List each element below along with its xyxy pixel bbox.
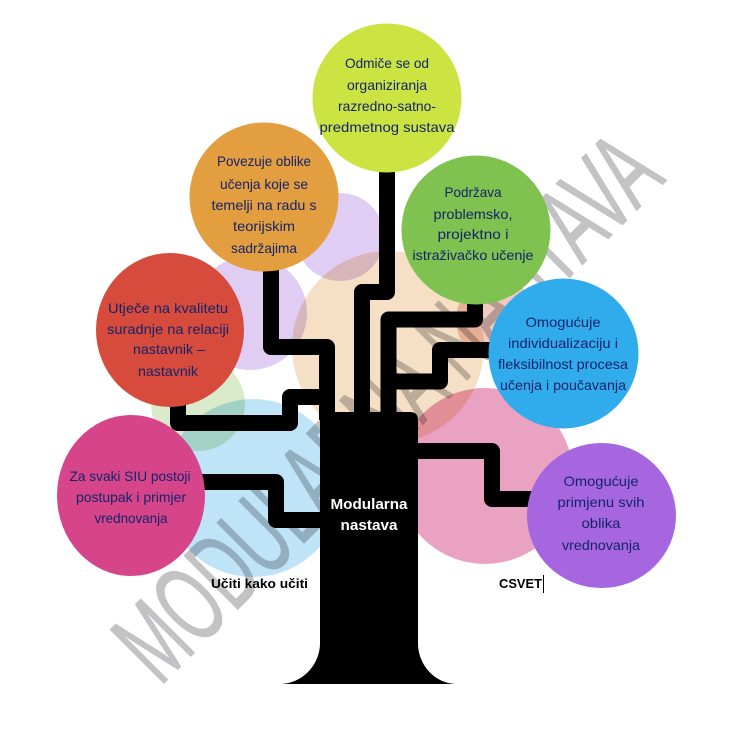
node: blue circle [488,278,638,428]
node: purple circle: primjenu svih [558,494,644,510]
node: magenta ellipse [57,415,205,576]
tree trunk [280,412,457,684]
node: purple circle: Omogućuje [564,473,639,489]
trunk label: Modularna nastava: Modularna [330,497,408,513]
node: purple circle: oblika [582,515,621,531]
node: magenta ellipse: Za svaki SIU postoji [70,468,190,484]
node: green circle: projektno i [438,226,508,242]
node: lime circle: predmetnog sustava [320,119,455,135]
node: orange circle: sadržajima [231,240,297,256]
node: lime circle [312,24,462,172]
node: blue circle: individualizaciju i [508,335,618,351]
node: purple circle: vrednovanja [562,537,640,553]
node: orange circle: učenja koje se [220,176,308,192]
tree branches [178,165,535,520]
node: blue circle: Omogućuje [526,314,601,330]
node: purple circle [527,443,676,588]
pale background foliage circles [151,193,573,577]
node: red circle: nastavnik – [133,341,205,357]
node: orange circle: temelji na radu s [212,197,316,213]
label: CSVET with text caret: CSVET [499,576,542,591]
trunk label: Modularna nastava: nastava [340,518,398,534]
node: lime circle: Odmiče se od [345,55,429,71]
node: green circle: problemsko, [434,206,512,222]
node: orange circle: Povezuje oblike [217,153,311,169]
label: Učiti kako učiti: Učiti kako učiti [211,576,308,591]
node: green circle: istraživačko učenje [412,247,534,263]
node: red circle: Utječe na kvalitetu [108,300,228,316]
node: red circle: nastavnik [138,363,199,379]
node: blue circle: fleksibilnost procesa [498,356,628,372]
node: lime circle: razredno-satno- [338,98,436,114]
node: orange circle [190,122,338,272]
node: magenta ellipse: vrednovanja [94,510,168,526]
node: blue circle: učenja i poučavanja [500,377,626,393]
node: red circle: suradnje na relaciji [107,321,229,337]
node: lime circle: organiziranja [347,77,427,93]
node: red circle [96,253,244,407]
node: green circle: Podržava [444,184,502,200]
trunk label: Modularna nastava [330,497,408,534]
node: orange circle: teorijskim [233,218,295,234]
node: green circle [402,156,550,304]
node: magenta ellipse: postupak i primjer [76,489,186,505]
